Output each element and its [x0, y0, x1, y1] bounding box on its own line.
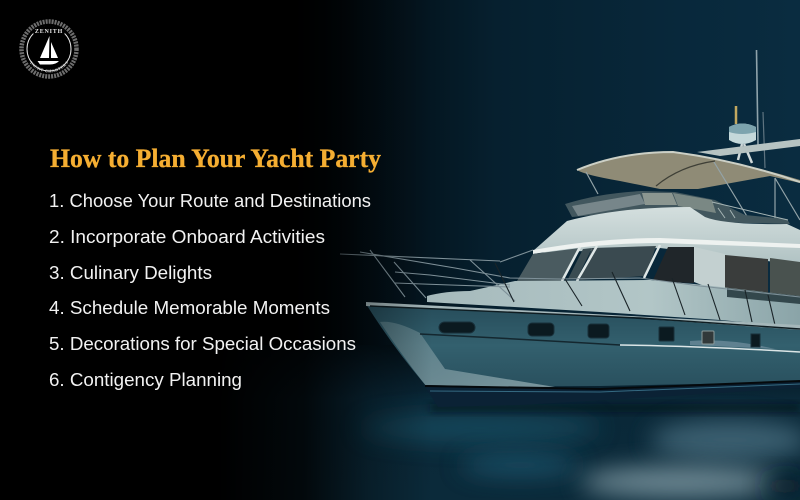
step 1: 1. Choose Your Route and Destinations: [49, 191, 371, 211]
list of steps: [49, 191, 371, 390]
yacht: rail stanchions: [495, 263, 775, 325]
yacht: windshield: [517, 245, 660, 281]
step 5: 5. Decorations for Special Occasions: [49, 334, 356, 354]
yacht: hull bow highlight: [380, 322, 555, 387]
logo: curved tagline: YACHT CHARTERS: [30, 60, 68, 72]
yacht: mast and antennas: [736, 50, 765, 168]
yacht: hull: [366, 304, 800, 387]
yacht: rails: [340, 250, 800, 301]
yacht: rub rail: [366, 302, 800, 330]
logo: top wordmark: ZENITH: [35, 29, 63, 35]
step 2: 2. Incorporate Onboard Activities: [49, 227, 325, 247]
yacht: upper cabin: [533, 207, 800, 265]
yacht: hull strake: [420, 334, 800, 352]
yacht: flybridge rail: [565, 191, 790, 224]
logo: rope ring: [22, 22, 76, 76]
background: sea water: [0, 345, 800, 500]
logo: bottom wordmark path: [27, 58, 71, 72]
yacht: portholes: [439, 322, 760, 347]
yacht: bimini canopy: [577, 152, 800, 220]
yacht: radar arch: [697, 139, 800, 156]
logo: inner ring: [27, 27, 71, 71]
yacht: waterline and boot stripe: [424, 381, 800, 407]
logo: sailboat: [38, 36, 59, 64]
step 6: 6. Contigency Planning: [49, 370, 242, 390]
yacht: radome: [729, 124, 756, 163]
step 3: 3. Culinary Delights: [49, 263, 212, 283]
yacht: cabin shadow band: [533, 238, 800, 254]
logo: black band for ring text: [33, 26, 65, 39]
logo: Zenith Yacht Charters: [19, 19, 79, 79]
yacht: side windows: [653, 247, 800, 300]
title: How to Plan Your Yacht Party: [50, 144, 381, 173]
yacht: lower window strip: [727, 288, 800, 304]
yacht: hull top shadow line: [370, 306, 800, 329]
yacht: [340, 50, 800, 407]
step 4: 4. Schedule Memorable Moments: [49, 298, 330, 318]
yacht: main deck: [427, 280, 800, 327]
background: night sky: [0, 0, 800, 345]
